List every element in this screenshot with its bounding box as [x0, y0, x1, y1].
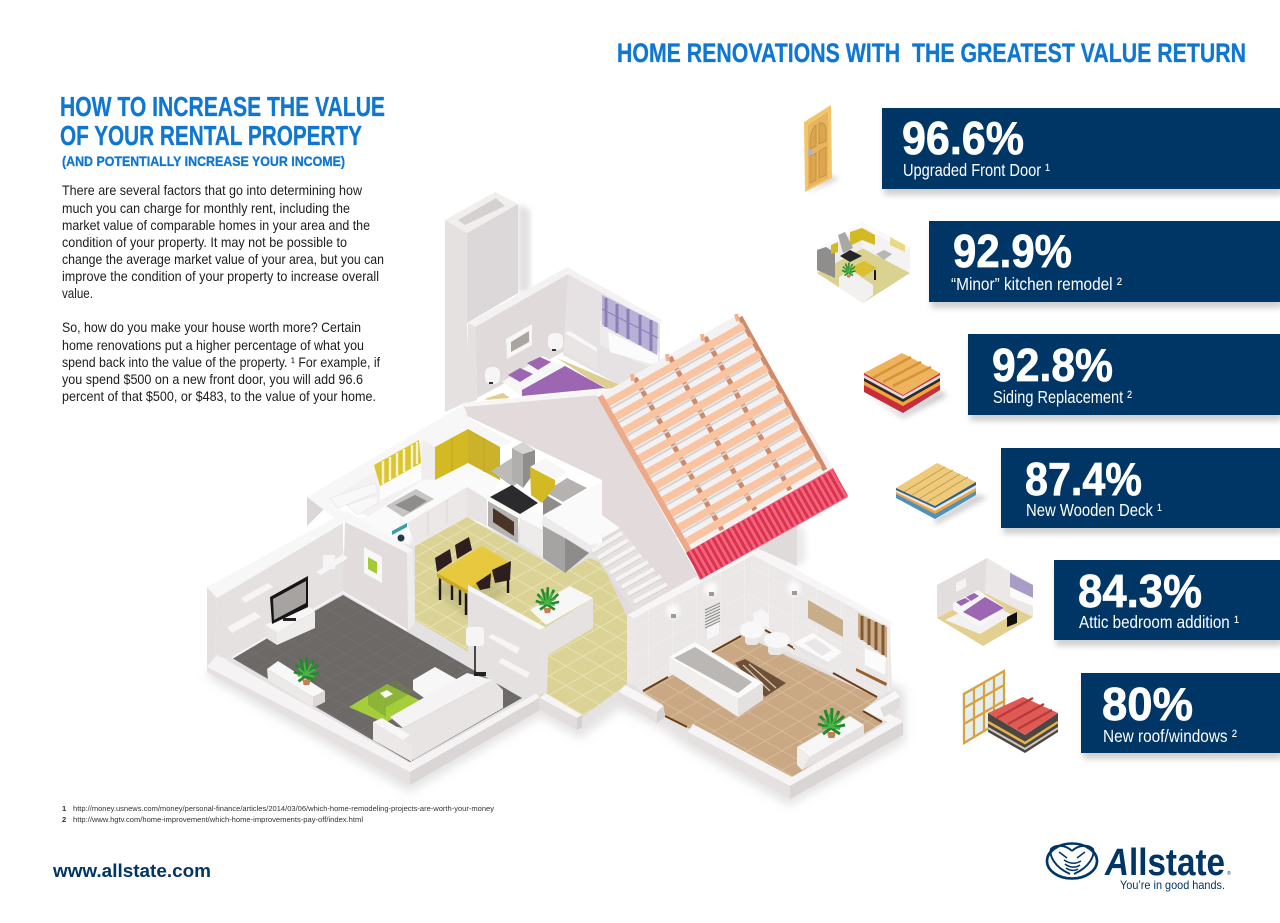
icon: window and roof tiles: [962, 669, 1058, 753]
stat: wooden deck: [1001, 448, 1280, 534]
left edge rafter: [600, 396, 690, 553]
baseboards: [643, 630, 882, 727]
stairs: [590, 530, 667, 617]
red tiles: [687, 468, 848, 580]
upper cabinets: [422, 415, 512, 480]
rafters: [635, 317, 825, 530]
stat: upgraded front door: 96.6%: [902, 112, 1024, 164]
living room: [207, 511, 582, 785]
worktop: [348, 463, 542, 545]
chimney: [445, 192, 530, 412]
left low wall: [619, 685, 664, 723]
website url: www.allstate.com: [52, 860, 211, 881]
gable wall and back wall: [463, 389, 806, 617]
partition shelves: [488, 634, 530, 678]
footnotes: 1: [62, 804, 67, 813]
rafter ends: [632, 314, 738, 381]
stat: upgraded front door: [882, 108, 1280, 195]
washer: [392, 523, 407, 542]
kitchen shelves: [330, 483, 378, 515]
second paragraph: spend back into the value of the property. ¹ For example, if: [62, 354, 380, 370]
stat: siding replacement: [968, 334, 1280, 421]
stat: wooden deck: New Wooden Deck ¹: [1026, 500, 1162, 520]
icon: siding stack: [864, 353, 947, 418]
sink: [386, 489, 434, 517]
stat: kitchen remodel: 92.9%: [953, 225, 1072, 277]
front wall: [688, 717, 903, 799]
kitchen window blind: [374, 440, 421, 500]
mirror: [808, 600, 843, 637]
partition plant: [536, 587, 559, 613]
second paragraph: So, how do you make your house worth more? Certain: [62, 319, 361, 335]
bathtub: [669, 642, 763, 717]
living room front wall: [207, 655, 540, 785]
stat: siding replacement: Siding Replacement ²: [993, 387, 1132, 407]
central partition: [466, 585, 593, 695]
footnotes: [62, 804, 494, 824]
radiator bench: [565, 331, 597, 370]
allstate logo: ®: [1227, 870, 1231, 877]
wall lights: [667, 582, 800, 618]
intro paragraph: [62, 182, 384, 301]
kitchen and dining floor: [415, 517, 627, 717]
bathroom: [619, 548, 903, 799]
stove: [490, 485, 538, 514]
sideboard: [267, 661, 325, 708]
intro paragraph: There are several factors that go into determining how: [62, 182, 363, 198]
wall art: [364, 547, 382, 583]
entry stub wall: [540, 693, 582, 730]
fridge: [543, 526, 589, 573]
batten shadows: [608, 332, 813, 536]
picture frame: [506, 324, 532, 359]
second paragraph: home renovations put a higher percentage of what you: [62, 337, 364, 353]
tv stand: [265, 607, 315, 645]
kitchen: [307, 405, 620, 573]
stat: new roof and windows: New roof/windows ²: [1103, 726, 1237, 746]
second paragraph: percent of that $500, or $483, to the value of your home.: [62, 388, 376, 404]
bidet: [764, 632, 790, 655]
icon: good hands: [1047, 844, 1097, 878]
lower cabinets and oven: [407, 487, 543, 558]
stat: kitchen remodel: [929, 221, 1280, 308]
roof: [597, 314, 848, 580]
intro paragraph: condition of your property. It may not be possible to: [62, 234, 347, 250]
range hood: [491, 442, 535, 488]
living room plant: [294, 657, 319, 685]
allstate logo: Allstate: [1104, 842, 1225, 884]
left heading: [60, 91, 385, 169]
intro paragraph: market value of comparable homes in your area and the: [62, 217, 370, 233]
stat: siding replacement: 92.8%: [992, 339, 1113, 391]
intro paragraph: value.: [62, 285, 93, 301]
left heading: HOW TO INCREASE THE VALUE: [60, 91, 385, 122]
baseboard: [232, 592, 407, 658]
icon: door: [804, 105, 840, 192]
dining table: [432, 537, 511, 618]
attic bedroom: [465, 267, 662, 404]
intro paragraph: improve the condition of your property to increase overall: [62, 268, 379, 284]
icon: kitchen room: [817, 222, 910, 303]
bed: [502, 356, 605, 396]
upper landing block: [543, 482, 620, 552]
intro paragraph: much you can charge for monthly rent, including the: [62, 200, 350, 216]
footnotes: 2: [62, 815, 66, 824]
stat: attic bedroom: [1054, 560, 1280, 646]
stat: wooden deck: 87.4%: [1025, 453, 1142, 505]
stat: attic bedroom: 84.3%: [1078, 565, 1202, 617]
bathroom plant: [818, 708, 845, 738]
allstate logo: [1047, 842, 1231, 892]
stat: new roof and windows: [1081, 673, 1280, 759]
house shadow: [206, 520, 905, 805]
rug: [349, 684, 423, 723]
television: [270, 576, 308, 624]
second paragraph: you spend $500 on a new front door, you will add 96.6: [62, 371, 363, 387]
floor lamp: [466, 627, 486, 676]
intro paragraph: change the average market value of your area, but you can: [62, 251, 384, 267]
footnotes: http://money.usnews.com/money/personal-finance/articles/2014/03/06/which-home-remodeling-projects-are-worth-your-money: [73, 804, 494, 813]
battens: [606, 326, 820, 544]
icon: attic bedroom: [937, 558, 1033, 646]
vanity sink: [793, 633, 842, 673]
towel rail: [705, 603, 720, 640]
stat: upgraded front door: Upgraded Front Door ¹: [903, 160, 1050, 180]
glass coffee table: [368, 680, 413, 717]
stat: attic bedroom: Attic bedroom addition ¹: [1079, 612, 1239, 632]
allstate logo: You’re in good hands.: [1120, 878, 1225, 892]
left heading: (AND POTENTIALLY INCREASE YOUR INCOME): [62, 154, 345, 169]
window-side low wall: [863, 691, 903, 726]
second paragraph: [62, 319, 380, 404]
wall shelves: [227, 554, 348, 633]
window with blind: [856, 613, 887, 686]
toilet: [740, 609, 769, 645]
stat: kitchen remodel: “Minor” kitchen remodel ²: [951, 274, 1122, 294]
stat: new roof and windows: 80%: [1102, 678, 1193, 730]
right wall cabinet: [530, 458, 567, 503]
house illustration: [206, 192, 905, 805]
sofa: [373, 667, 503, 762]
gray counter panel: [543, 478, 587, 517]
window and blind: [600, 295, 660, 372]
bedside lamps: [485, 333, 563, 384]
left heading: OF YOUR RENTAL PROPERTY: [60, 120, 362, 151]
bench: [797, 716, 864, 770]
bath rug: [735, 659, 786, 697]
footnotes: http://www.hgtv.com/home-improvement/which-home-improvements-pay-off/index.html: [73, 815, 363, 824]
icon: wooden deck: [896, 463, 988, 525]
